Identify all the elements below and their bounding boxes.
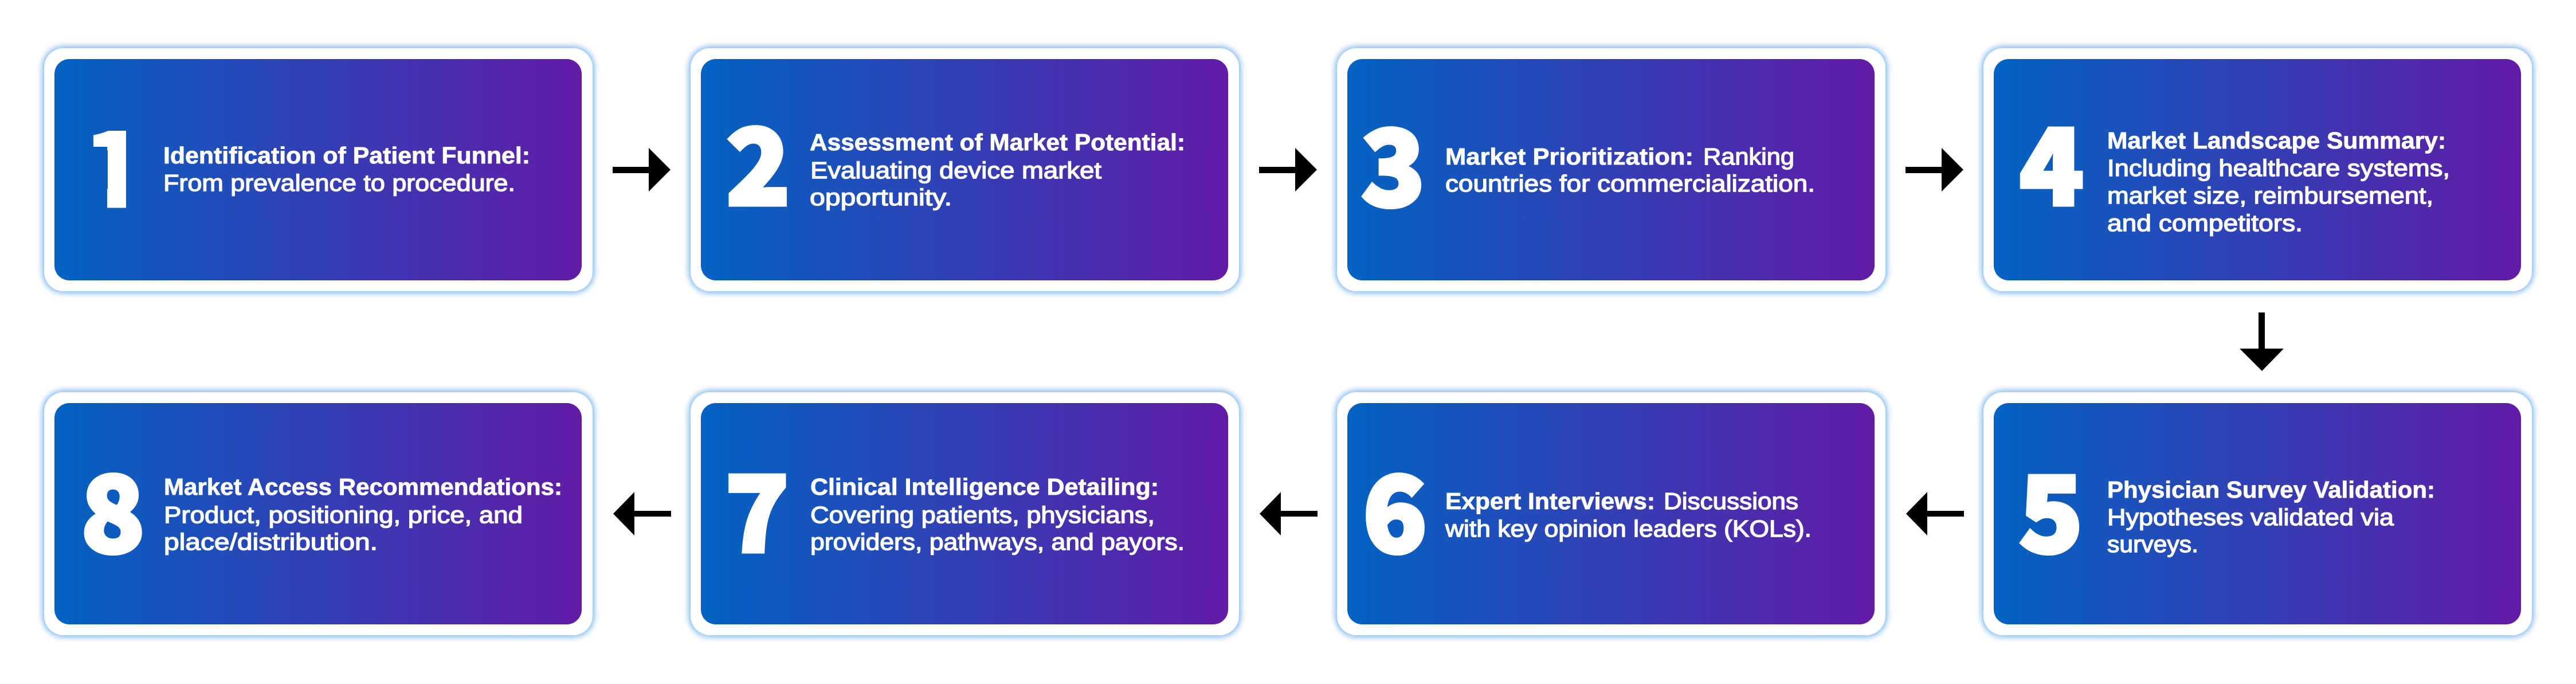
arrow: step 1 to 2 [613, 148, 671, 191]
text: step 6 description: Expert Interviews: [1445, 488, 1655, 514]
step number 3: 3 [1361, 84, 1425, 236]
text: step 7 description: Covering patients, physicians, [810, 502, 1155, 528]
text: step 3 description: Ranking [1703, 143, 1794, 170]
step number 2: 2 [726, 83, 790, 235]
step number 5: 5 [2019, 431, 2083, 583]
text: step 5 description [2107, 476, 2435, 557]
text: step 8 description: Product, positioning, price, and [164, 502, 523, 528]
text: step 2 description [810, 129, 1185, 210]
text: step 6 description [1445, 488, 1812, 542]
text: step 3 description: Market Prioritization: [1445, 143, 1693, 170]
text: step 5 description: Hypotheses validated via [2107, 504, 2394, 530]
text: step 4 description [2107, 127, 2450, 236]
step number 6: 6 [1363, 431, 1427, 583]
text: step 1 description: Identification of Patient Funnel: [163, 142, 530, 169]
text: step 5 description: surveys. [2107, 531, 2198, 557]
text: step 8 description: Market Access Recommendations: [164, 474, 562, 500]
panel: step 3 market prioritization [1335, 46, 1888, 294]
text: step 8 description [164, 474, 562, 555]
text: step 8 description: place/distribution. [164, 529, 378, 555]
arrow: step 2 to 3 [1259, 148, 1317, 191]
text: step 4 description: and competitors. [2107, 210, 2303, 236]
text: step 6 description: with key opinion leaders (KOLs). [1445, 515, 1812, 542]
text: step 2 description: Evaluating device market [810, 157, 1102, 183]
text: step 3 description [1445, 143, 1815, 197]
text: step 1 description [163, 142, 530, 196]
arrow: step 5 to 6 [1906, 492, 1964, 536]
panel: step 4 market landscape summary [1981, 46, 2534, 294]
text: step 2 description: opportunity. [810, 184, 952, 210]
panel: step 5 physician survey validation [1981, 390, 2534, 638]
text: step 7 description: providers, pathways, and payors. [810, 529, 1185, 555]
arrow: step 4 to 5 [2240, 312, 2284, 371]
panel: step 7 clinical intelligence detailing [688, 390, 1241, 638]
text: step 5 description: Physician Survey Validation: [2107, 476, 2435, 503]
text: step 4 description: Including healthcare systems, [2107, 155, 2450, 181]
arrow: step 6 to 7 [1260, 492, 1318, 536]
panel: step 8 market access recommendations [42, 390, 595, 638]
step number 1: 1 [85, 84, 149, 236]
text: step 1 description: From prevalence to procedure. [163, 170, 515, 196]
arrow: step 3 to 4 [1905, 148, 1963, 191]
text: step 7 description: Clinical Intelligence Detailing: [810, 474, 1159, 500]
text: step 7 description [810, 474, 1185, 555]
text: step 3 description: countries for commercialization. [1445, 170, 1815, 197]
panel: step 2 assessment of market potential [688, 46, 1241, 294]
text: step 6 description: Discussions [1664, 488, 1798, 514]
step number 7: 7 [725, 430, 789, 582]
panel: step 1 identification of patient funnel [42, 46, 595, 294]
text: step 2 description: Assessment of Market Potential: [810, 129, 1185, 155]
step number 8: 8 [81, 431, 145, 583]
step number 4: 4 [2020, 83, 2084, 235]
text: step 4 description: Market Landscape Summary: [2107, 127, 2446, 154]
panel: step 6 expert interviews [1335, 390, 1888, 638]
arrow: step 7 to 8 [613, 492, 671, 536]
text: step 4 description: market size, reimbursement, [2107, 182, 2433, 209]
